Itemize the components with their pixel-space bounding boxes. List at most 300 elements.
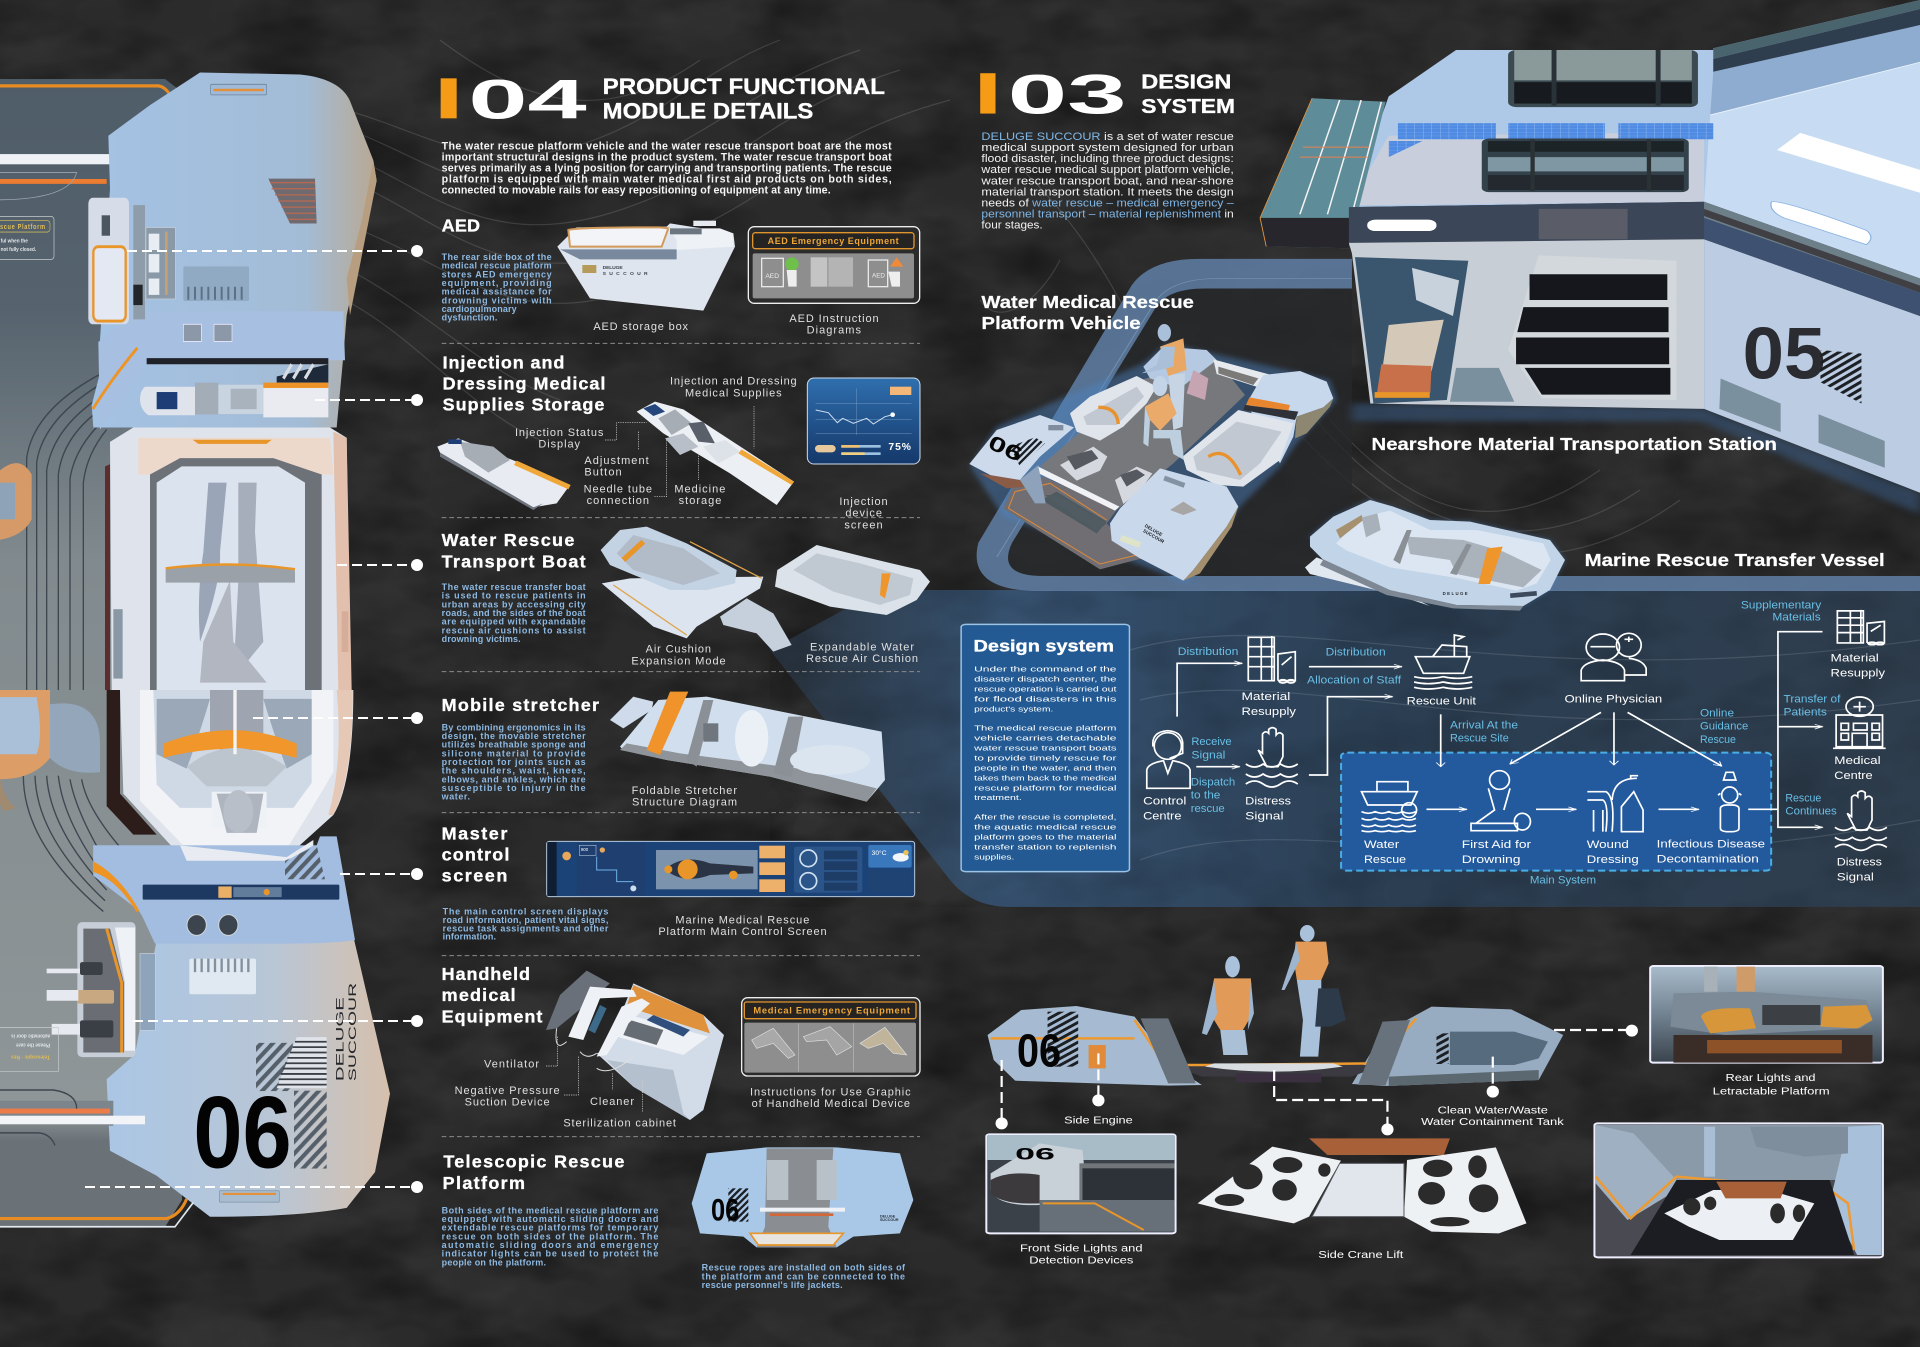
- detail captions: Water Containment Tank: [1421, 1117, 1564, 1128]
- upper module shoulder band: [98, 311, 345, 430]
- flow labels: blue: Signal: [1191, 748, 1225, 761]
- main system box: [1341, 753, 1771, 871]
- panel: design system: [961, 624, 1129, 872]
- telescopic description: people on the platform.: [442, 1257, 546, 1267]
- seated rescuer: [1143, 376, 1184, 460]
- design system intro: medical support system designed for urban: [981, 142, 1234, 154]
- telescopic description: Both sides of the medical rescue platform are: [442, 1205, 658, 1215]
- heading: master control screen: screen: [442, 866, 507, 886]
- icon: control centre: [1147, 731, 1190, 788]
- blue water backdrop: [770, 590, 1920, 907]
- heading: water rescue transport boat: Water Rescue: [442, 530, 574, 550]
- platform vehicle heading: Water Medical Rescue: [981, 293, 1194, 312]
- captions: boat: Rescue Air Cushion: [806, 653, 918, 665]
- injection device labels: Display: [538, 439, 580, 451]
- telescopic platform model: DELUGE: [880, 1215, 896, 1219]
- flow labels: blue: Distribution: [1178, 645, 1238, 658]
- flow labels: white: Rescue: [1364, 853, 1406, 866]
- heading: 04 product functional module details: PRODUCT FUNCTIONAL: [603, 74, 885, 99]
- intro paragraph: serves primarily as a lying position for carrying and transporting patients. The rescue: [442, 162, 892, 174]
- deck pillar and wall: [1020, 465, 1119, 532]
- bottom right: vehicle side view and details: [986, 925, 1883, 1266]
- photo: front side lights: [986, 1134, 1176, 1233]
- marine rescue transfer vessel: DELUGE: [1443, 591, 1468, 596]
- lower module shoulder: [93, 836, 355, 944]
- heading: 03 design system: DESIGN: [1141, 71, 1231, 93]
- flow labels: white: Resupply: [1831, 667, 1885, 679]
- heading: injection storage: Dressing Medical: [443, 373, 605, 393]
- intro paragraph: platform is equipped with main water medical first aid products on both sides,: [442, 173, 892, 185]
- floor sign: ful when the: [1, 238, 28, 245]
- handheld labels: Cleaner: [590, 1096, 634, 1108]
- flow arrows: [1177, 632, 1823, 827]
- dark band: [1349, 202, 1920, 316]
- master control screen: 800: [581, 847, 589, 852]
- lower floor rail: [0, 1090, 279, 1227]
- floor sign: scue Platform: [0, 223, 45, 231]
- boat description: roads, and the sides of the boat: [442, 608, 586, 618]
- lower module body: [93, 845, 390, 1217]
- heading: handheld medical equipment: Handheld: [442, 964, 530, 984]
- medical emergency equipment card: [742, 998, 920, 1076]
- detail captions: Letractable Platform: [1713, 1087, 1830, 1097]
- panel: design system: the aquatic medical rescue: [974, 823, 1116, 831]
- icon: distress signal right: [1835, 791, 1887, 850]
- flow labels: white: Decontamination: [1657, 852, 1759, 865]
- flow labels: white: Wound: [1587, 838, 1629, 851]
- caption: foldable stretcher: [632, 785, 737, 809]
- icon: rescue unit ship: [1414, 635, 1472, 689]
- panel: design system: water rescue transport boats: [973, 745, 1117, 753]
- caption: AED instruction diagrams: Diagrams: [807, 325, 861, 337]
- callout: stretcher: [253, 712, 423, 724]
- dashed callouts: [996, 1025, 1638, 1135]
- master screen description: road information, patient vital signs,: [443, 915, 608, 925]
- master screen description: information.: [443, 932, 496, 942]
- front left module with number: [969, 415, 1074, 488]
- caption: AED storage box: AED storage box: [593, 321, 688, 333]
- flow labels: white: Drowning: [1462, 853, 1521, 866]
- marine rescue transfer vessel: [1305, 500, 1565, 611]
- heading: telescopic rescue platform: Platform: [443, 1173, 525, 1193]
- caption: AED instruction diagrams: [789, 313, 879, 337]
- flow labels: blue: Guidance: [1700, 720, 1748, 732]
- intro paragraph: connected to movable rails for easy repositioning of equipment at any time.: [442, 184, 831, 196]
- AED storage box: DELUGE: [603, 265, 623, 271]
- detail captions: Rear Lights and: [1725, 1073, 1816, 1084]
- intro paragraph: The water rescue platform vehicle and the water rescue transport boat are the most: [442, 140, 892, 152]
- lower window block: [1482, 139, 1689, 192]
- heading: water rescue transport boat: Transport Boat: [442, 551, 586, 571]
- vehicle glow: [970, 343, 1337, 583]
- brand mark rotated: [335, 983, 359, 1081]
- heading: handheld medical equipment: Equipment: [442, 1006, 542, 1026]
- caption: main control screen: Platform Main Control Screen: [658, 926, 827, 938]
- flow labels: blue: rescue: [1191, 802, 1225, 815]
- side wall: [1704, 239, 1920, 493]
- AED description: [442, 252, 552, 323]
- design system intro: [981, 131, 1234, 231]
- boat interior with patient: [140, 690, 333, 849]
- panel: design system: to provide timely rescue for: [974, 755, 1117, 763]
- AED emergency equipment card: [748, 227, 920, 303]
- design system flow diagram: [961, 598, 1887, 886]
- injection device labels: Needle tube: [584, 483, 652, 495]
- heading: master control screen: [442, 823, 509, 886]
- stretcher description: elbows, and ankles, which are: [442, 774, 586, 784]
- stretcher description: susceptible to injury in the: [442, 783, 586, 793]
- icon: first aid: [1471, 771, 1530, 831]
- flow labels: blue: Rescue Site: [1450, 731, 1509, 744]
- panel: design system: Design system: [974, 638, 1114, 656]
- transport boat: [110, 428, 350, 690]
- foldable stretcher: [610, 692, 885, 802]
- brand mark rotated: DELUGE: [335, 997, 346, 1081]
- main deck: [1040, 360, 1245, 510]
- vehicle number 06: 06: [193, 1075, 292, 1189]
- caption: injection device screen: screen: [844, 519, 883, 531]
- captions: boat: Expandable Water: [810, 641, 914, 653]
- telescopic description: automatic sliding doors and emergency: [442, 1240, 658, 1250]
- wall panels: [1450, 368, 1885, 468]
- heading: 04 product functional module details: MODULE DETAILS: [603, 98, 813, 123]
- panel: design system: After the rescue is completed,: [974, 813, 1116, 821]
- caption: handheld instructions: Instructions for Use Graphic: [750, 1087, 911, 1099]
- heading: 03 design system: [980, 64, 1235, 126]
- heading: 04 product functional module details: [441, 67, 885, 130]
- panel: design system: takes them back to the medical: [974, 774, 1116, 782]
- flow labels: blue: Rescue: [1785, 792, 1821, 804]
- photo: rear lights: [1650, 966, 1883, 1063]
- floor stripes lower: [23, 776, 120, 911]
- caption: injection device screen: Injection: [839, 496, 888, 508]
- expandable air cushion boat: [775, 545, 930, 615]
- heading: mobile stretcher: Mobile stretcher: [442, 695, 599, 715]
- caption: main control screen: [658, 914, 827, 938]
- detail captions: [1020, 1073, 1830, 1266]
- telescopic platform model: [692, 1147, 913, 1247]
- heading: 03 design system: SYSTEM: [1141, 95, 1235, 117]
- boat description: drowning victims.: [442, 634, 521, 644]
- detail captions: Detection Devices: [1029, 1255, 1133, 1266]
- AED emergency equipment card: AED Emergency Equipment: [768, 236, 899, 246]
- flow labels: blue: Online: [1700, 707, 1734, 719]
- detail captions: Front Side Lights and: [1020, 1244, 1142, 1254]
- panel: design system: disaster dispatch center, the: [974, 675, 1116, 683]
- master screen description: [443, 906, 609, 942]
- rescue ropes note: rescue personnel's life jackets.: [702, 1280, 843, 1290]
- telescopic description: equipped with automatic sliding doors and: [442, 1214, 658, 1224]
- heading: injection storage: [443, 352, 605, 415]
- seated rescuer at left edge: [0, 463, 32, 540]
- lower module details: [0, 845, 339, 1169]
- back module: [1143, 347, 1217, 388]
- panel: design system: treatment.: [974, 794, 1022, 802]
- flow labels: white: Material: [1831, 652, 1879, 664]
- icon: decontamination: [1716, 772, 1743, 832]
- handheld labels: Suction Device: [465, 1097, 550, 1109]
- flow labels: white: Water: [1364, 838, 1400, 851]
- solar panels: [1389, 123, 1713, 157]
- rescuer with stethoscope at left: [0, 690, 100, 811]
- shelf opening: [1508, 255, 1677, 400]
- telescopic description: [442, 1205, 658, 1267]
- flow labels: white: Resupply: [1241, 705, 1296, 718]
- front right module: [1110, 468, 1238, 581]
- flow labels: blue: Rescue: [1700, 733, 1736, 746]
- callout: AED: [127, 245, 423, 257]
- detail captions: Clean Water/Waste: [1438, 1105, 1548, 1116]
- master control screen: [547, 841, 915, 897]
- closed injection device: [437, 438, 571, 510]
- boat description: are equipped with expandable: [442, 617, 586, 627]
- handheld labels: [455, 1059, 676, 1130]
- flow labels: blue: Patients: [1784, 706, 1827, 718]
- flow labels: white: Centre: [1143, 810, 1181, 822]
- flow labels: blue: Continues: [1785, 805, 1837, 817]
- roof edge band: [1713, 0, 1920, 72]
- boat description: urban areas by accessing city: [442, 599, 586, 609]
- injection device labels: Medicine: [674, 483, 725, 495]
- flow labels: white: Medical: [1834, 754, 1881, 767]
- roof: [1349, 0, 1920, 279]
- stretcher description: the shoulders, waist, knees,: [442, 766, 586, 776]
- heading: AED: AED: [442, 216, 480, 236]
- master screen description: The main control screen displays: [443, 906, 608, 916]
- design system intro: flood disaster, including three product designs:: [981, 153, 1234, 165]
- icon: wound dressing: [1587, 776, 1643, 832]
- back wall: [1187, 359, 1272, 400]
- flow labels: blue: Arrival At the: [1450, 718, 1518, 731]
- caption: injection device screen: [839, 496, 888, 531]
- handheld labels: Sterilization cabinet: [563, 1118, 676, 1130]
- boat details: [113, 438, 348, 690]
- boat description: The water rescue transfer boat: [442, 582, 586, 592]
- stretcher description: [441, 722, 586, 802]
- captions: boat: [631, 641, 918, 667]
- rescue ropes note: the platform and can be connected to the: [702, 1271, 905, 1281]
- flow labels: blue: Materials: [1772, 611, 1821, 623]
- floor sign: not fully closed.: [1, 246, 37, 253]
- flow labels: white: Distress: [1837, 856, 1882, 868]
- injection device labels: Injection Status: [515, 427, 604, 439]
- injection device labels: [515, 376, 797, 507]
- flow labels: blue: Receive: [1191, 735, 1232, 748]
- AED description: stores AED emergency: [442, 269, 552, 279]
- panel: design system: supplies.: [974, 853, 1014, 861]
- light bars: [1367, 220, 1436, 231]
- glass walkway: [1260, 98, 1386, 248]
- stretcher description: silicone material to provide: [442, 748, 586, 758]
- medical emergency equipment card: Medical Emergency Equipment: [753, 1006, 910, 1016]
- design system intro: four stages.: [981, 219, 1043, 231]
- section 04 upper: heading, AED, injection: [437, 67, 920, 531]
- stretcher description: By combining ergonomics in its: [442, 722, 586, 732]
- injection device labels: connection: [587, 495, 649, 507]
- AED description: dysfunction.: [442, 313, 497, 323]
- heading: handheld medical equipment: [442, 964, 542, 1026]
- floor orange trim and rail: [0, 86, 170, 690]
- panel: design system: rescue platform for medical: [974, 784, 1116, 792]
- upper module side wall: [347, 160, 377, 315]
- flow labels: white: Signal: [1245, 810, 1284, 822]
- flow labels: white: Material: [1241, 690, 1290, 703]
- flow labels: white: Online Physician: [1564, 693, 1662, 705]
- air cushion expansion boat: [601, 527, 792, 652]
- boat description: [442, 582, 586, 644]
- heading: injection storage: Injection and: [443, 352, 564, 372]
- flow labels: white: Dressing: [1587, 853, 1639, 866]
- caption: foldable stretcher: Structure Diagram: [632, 797, 737, 809]
- captions: boat: Expansion Mode: [631, 655, 726, 667]
- captions: boat: Air Cushion: [646, 644, 711, 656]
- heading: master control screen: Master: [442, 823, 507, 843]
- AED description: medical assistance for: [442, 287, 552, 297]
- panel: design system: rescue operation is carried out: [974, 685, 1117, 693]
- rescue ropes note: Rescue ropes are installed on both sides of: [702, 1263, 906, 1273]
- callout: telescopic platform: [85, 1181, 423, 1193]
- right top module: [1243, 371, 1333, 463]
- flow labels: blue: [1178, 598, 1841, 886]
- stretcher description: utilizes breathable sponge and: [442, 740, 586, 750]
- injection device in slot: [140, 364, 328, 417]
- AED description: drowning victims with: [442, 295, 552, 305]
- icon: online physician: [1581, 633, 1646, 681]
- lower module details: Telescopic · Res: [11, 1054, 50, 1060]
- callout: handheld: [133, 1015, 423, 1027]
- platform vehicle heading: [981, 293, 1194, 333]
- flow labels: white: First Aid for: [1462, 838, 1531, 851]
- master control screen: 30°C: [872, 849, 887, 857]
- handheld device cabinet: [545, 971, 724, 1120]
- boat nose over module: [180, 840, 313, 861]
- heading: handheld medical equipment: medical: [442, 985, 516, 1005]
- AED description: The rear side box of the: [442, 252, 552, 262]
- upper module details: [88, 84, 317, 341]
- callout: master screen: [340, 868, 423, 880]
- flow labels: blue: Dispatch: [1191, 776, 1235, 788]
- stretcher description: protection for joints such as: [442, 757, 586, 767]
- panel: design system: The medical rescue platform: [974, 725, 1116, 733]
- flow labels: white: Distress: [1245, 795, 1291, 807]
- AED description: medical rescue platform: [442, 261, 552, 271]
- design system intro: needs of water rescue – medical emergency –: [981, 197, 1234, 209]
- shadow glow: [1352, 404, 1920, 514]
- design system intro: DELUGE SUCCOUR is a set of water rescue: [981, 131, 1234, 143]
- heading: telescopic rescue platform: [443, 1152, 624, 1193]
- caption: handheld instructions: [750, 1087, 911, 1110]
- injection device labels: Adjustment: [584, 455, 649, 467]
- icon: material resupply: [1248, 636, 1295, 683]
- deck equipment boxes: [1060, 447, 1152, 504]
- floor of platform: [0, 79, 182, 1227]
- right stretcher pod: [1183, 410, 1293, 487]
- standing rescuer: [1142, 324, 1187, 430]
- AED description: cardiopulmonary: [442, 304, 517, 314]
- AED emergency equipment card: AED: [872, 272, 885, 279]
- flow labels: blue: Main System: [1530, 874, 1596, 886]
- front wall: [1349, 239, 1704, 409]
- icon: distress signal: [1246, 728, 1298, 787]
- open injection device: [605, 402, 794, 505]
- roof light panel: [1777, 133, 1920, 193]
- panel: design system: platform goes to the material: [974, 833, 1116, 841]
- lower glazed band: [1349, 132, 1704, 205]
- left stretcher pod: [1070, 376, 1157, 441]
- flow labels: white: Infectious Disease: [1657, 837, 1765, 850]
- panel: design system: Under the command of the: [974, 666, 1116, 674]
- telescopic platform model: SUCCOUR: [880, 1218, 899, 1222]
- injection device labels: Injection and Dressing: [670, 376, 797, 388]
- AED emergency equipment card: AED: [765, 273, 779, 280]
- upper window block: [1508, 50, 1698, 107]
- design system intro: water rescue transport boat, and near-shore: [981, 175, 1234, 187]
- section 04 lower: handheld equipment, telescopic platform: [442, 956, 920, 1290]
- boat description: rescue air cushions to assist: [442, 625, 586, 635]
- platform vehicle heading: Platform Vehicle: [981, 314, 1141, 333]
- heading: 03 design system: 03: [1008, 64, 1127, 126]
- side opening: [1355, 257, 1468, 404]
- icon: material resupply right: [1837, 610, 1884, 645]
- upper module body: [92, 72, 377, 428]
- panel: design system: people in the water, and then: [974, 764, 1116, 772]
- master screen description: rescue task assignments and other: [443, 924, 609, 934]
- design system intro: material transport station. It meets the design: [981, 186, 1234, 198]
- front right module: DELUGE: [1144, 523, 1163, 537]
- telescopic description: indicator lights can be used to protect the: [442, 1249, 658, 1259]
- injection device labels: storage: [679, 495, 721, 507]
- stretcher description: water.: [441, 792, 470, 802]
- rounded blue route band around the vehicle: [977, 259, 1920, 591]
- AED storage box: [557, 221, 735, 311]
- flow labels: blue: to the: [1191, 789, 1220, 801]
- heading: master control screen: control: [442, 844, 509, 864]
- callout: transport boat: [337, 559, 423, 571]
- section 04 middle: boat, stretcher, screen: [441, 527, 930, 942]
- AED description: equipment, providing: [442, 278, 552, 288]
- caption: foldable stretcher: Foldable Stretcher: [632, 785, 737, 797]
- flow labels: blue: Supplementary: [1741, 598, 1822, 611]
- panel: design system: product's system.: [974, 705, 1053, 713]
- panel: design system: vehicle carries detachable: [974, 735, 1116, 743]
- photo: retracted platform: [1594, 1123, 1883, 1257]
- caption: AED instruction diagrams: AED Instruction: [789, 313, 879, 325]
- flow labels: blue: Transfer of: [1784, 693, 1841, 705]
- water medical rescue platform vehicle: [969, 324, 1337, 583]
- lower module details: Please the care: [16, 1042, 50, 1048]
- boat description: is used to rescue patients in: [442, 591, 586, 601]
- rescuer seated: [1202, 956, 1254, 1055]
- side view vehicle: [988, 1006, 1563, 1086]
- intro paragraph: important structural designs in the product system. The water rescue transport boat: [442, 151, 892, 163]
- telescopic description: rescue on both sides of the platform. The: [442, 1231, 658, 1241]
- icon: medical centre: [1833, 697, 1886, 748]
- floor sign: [0, 217, 54, 259]
- intro paragraph: [442, 140, 892, 196]
- flow labels: white: Signal: [1837, 871, 1874, 883]
- rescue ropes note: [702, 1263, 906, 1290]
- left vehicle: top view: [0, 72, 423, 1227]
- injection device screen: 75%: [888, 442, 911, 453]
- telescopic platform model: 06: [711, 1192, 739, 1228]
- flow labels: blue: Allocation of Staff: [1307, 674, 1401, 686]
- brand mark rotated: SUCCOUR: [347, 983, 359, 1081]
- caption: injection device screen: device: [845, 508, 882, 520]
- upper orange accent: [93, 348, 137, 409]
- caption: main control screen: Marine Medical Rescue: [675, 914, 809, 926]
- injection device screen: [807, 378, 920, 464]
- flow labels: white: Control: [1143, 795, 1186, 807]
